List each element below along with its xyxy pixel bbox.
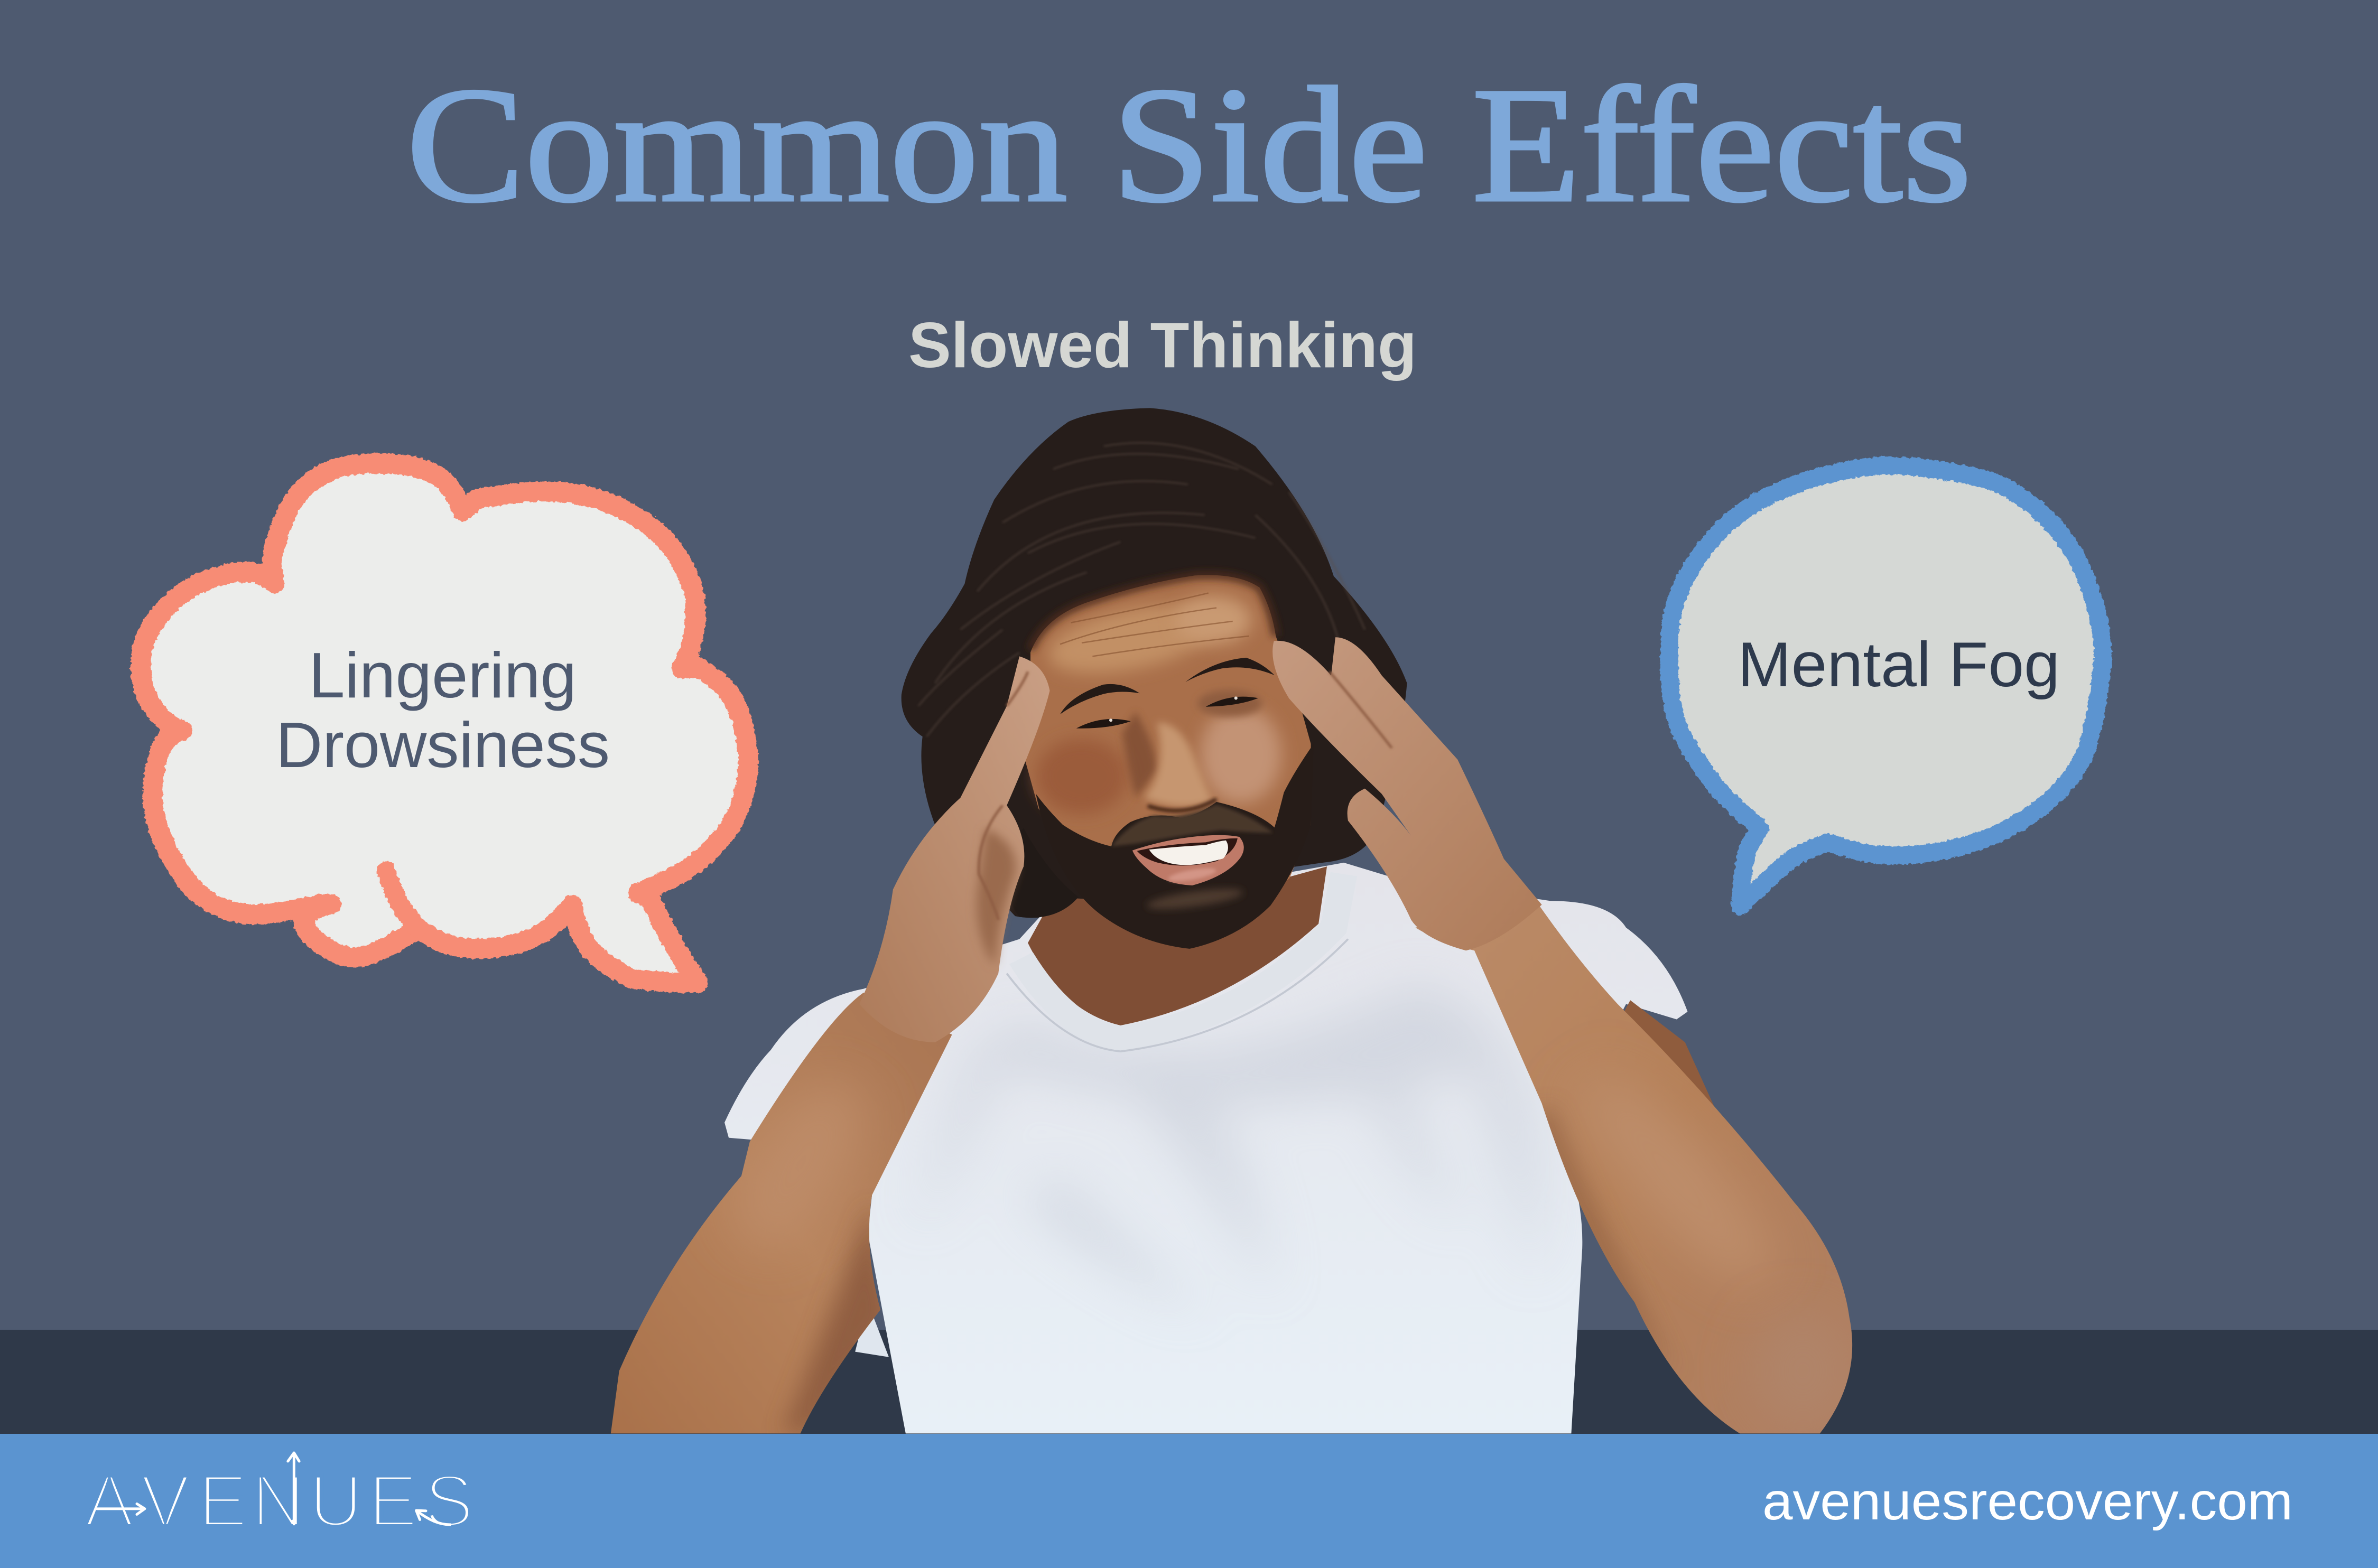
right eyebrow (1185, 658, 1275, 682)
nose shadow (1148, 799, 1216, 810)
left forearm (611, 993, 952, 1433)
face skin (1025, 575, 1311, 932)
right cheek light (1200, 706, 1281, 803)
arm and hand layer (611, 637, 1854, 1433)
forehead light (1043, 592, 1223, 686)
lips (1132, 835, 1244, 885)
text: drowsiness: Drowsiness (276, 709, 610, 781)
shirt (724, 863, 1687, 1433)
forehead light right (1176, 596, 1251, 644)
icon: blue round speech bubble (1669, 465, 2103, 906)
shirt folds (971, 988, 1532, 1267)
lower lip light (1167, 866, 1217, 884)
left cheek (1036, 739, 1128, 814)
left hand shadow (977, 828, 1016, 966)
right forearm (1415, 897, 1852, 1433)
neck (1028, 866, 1327, 1025)
text: mental fog: Mental Fog (1738, 629, 2060, 700)
panel: lingering drowsiness bubble (141, 463, 748, 983)
shirt tuft (855, 1302, 889, 1357)
rear right upper arm (1559, 1000, 1795, 1302)
right eye (1206, 697, 1258, 707)
title: Common Side Effects (406, 54, 1972, 236)
nose light (1144, 722, 1212, 807)
right eye socket (1197, 690, 1262, 717)
right hand crease (1330, 671, 1392, 748)
hair highlights (918, 443, 1365, 736)
footer bar (0, 1434, 2378, 1568)
left eyebrow (1060, 684, 1140, 714)
teeth (1149, 841, 1228, 865)
logo wordmark: AVENUES (85, 1459, 473, 1542)
rear hair curl (1006, 828, 1079, 918)
footer url: avenuesrecovery.com (1762, 1472, 2293, 1531)
forehead wrinkles (1060, 593, 1249, 656)
left finger split (1007, 671, 1028, 706)
heading: slowed thinking: Slowed Thinking (908, 309, 1417, 381)
right hand (1272, 637, 1542, 950)
left hand crease (979, 805, 1002, 920)
eye catchlights (1109, 696, 1238, 722)
face layer (1025, 575, 1314, 949)
beard (1036, 744, 1314, 949)
footer logo (85, 1453, 473, 1542)
mouth opening (1137, 838, 1238, 865)
dark floor band (0, 1330, 2378, 1435)
left hand (859, 656, 1049, 1042)
body and hair layer (724, 408, 1795, 1433)
illustration: man with headache (611, 408, 1854, 1433)
icon: coral cloud speech bubble (141, 463, 748, 983)
collar line (1007, 939, 1348, 1051)
moustache (1111, 805, 1273, 846)
panel: mental fog bubble (1669, 465, 2103, 906)
hair back (902, 408, 1407, 918)
left eye (1076, 719, 1131, 729)
hairline shadow (1030, 575, 1276, 650)
left forearm shading (729, 1093, 880, 1433)
text: lingering: Lingering (309, 639, 577, 711)
logo arrows (97, 1453, 450, 1525)
right forearm shade (1542, 1089, 1852, 1433)
chin patch (1146, 885, 1244, 913)
nose side shadow (1122, 712, 1157, 798)
collar (1021, 874, 1344, 1039)
